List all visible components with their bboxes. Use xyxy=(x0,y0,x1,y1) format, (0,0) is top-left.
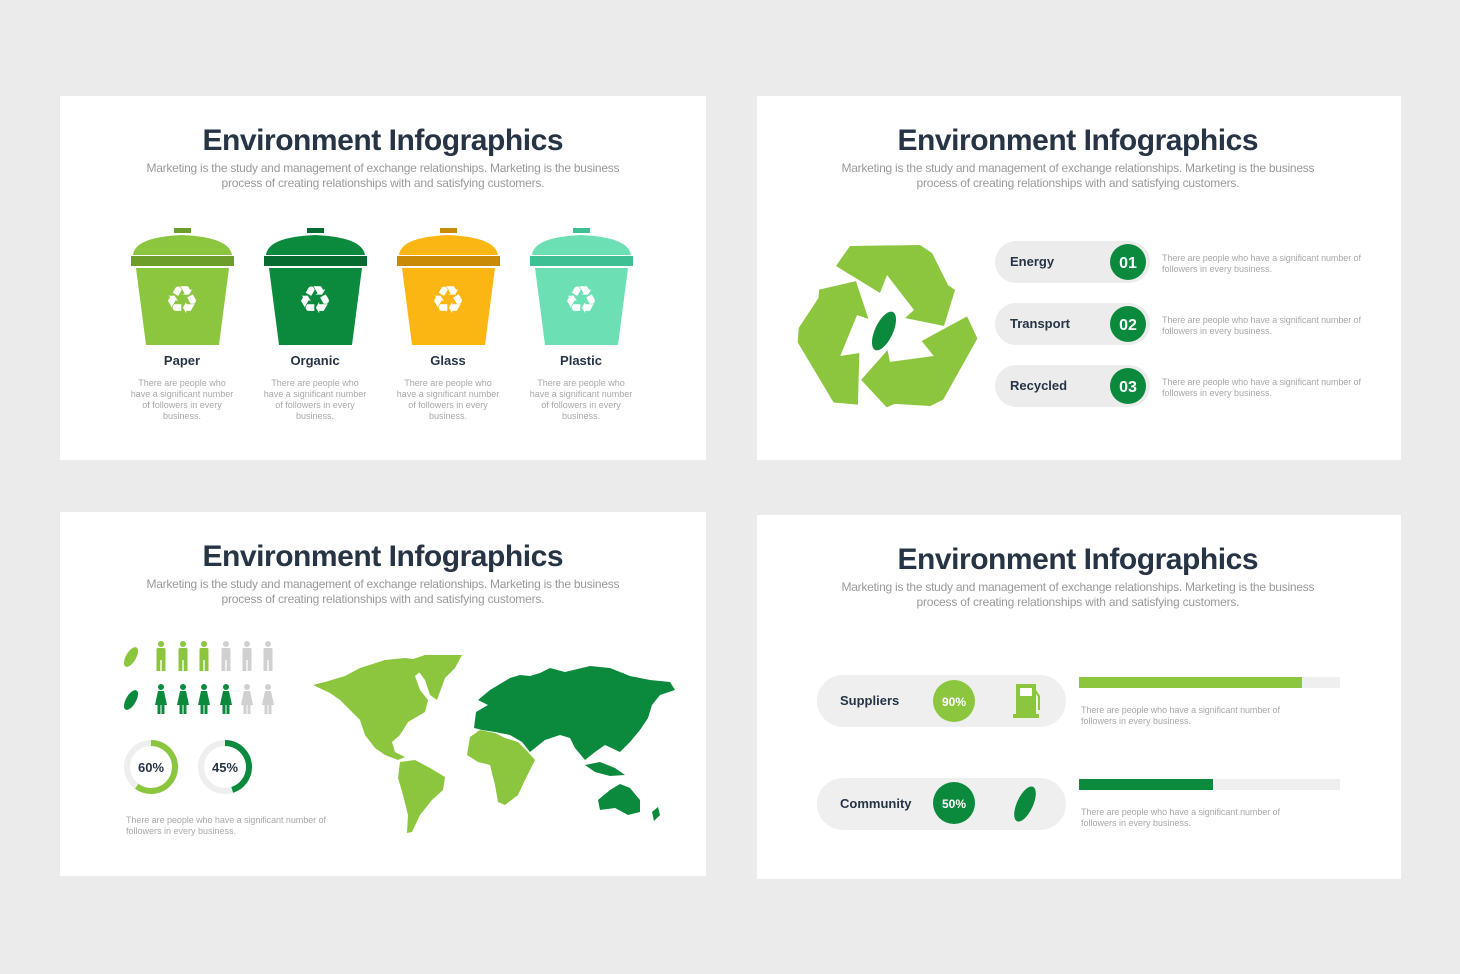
bin: glass: have a significant number xyxy=(397,389,499,399)
bin: organic: have a significant number xyxy=(264,389,366,399)
item: energy: There are people who have a significant number of xyxy=(1162,253,1361,263)
subtitle xyxy=(146,577,620,606)
title: Environment Infographics xyxy=(898,543,1258,576)
world map xyxy=(313,655,675,833)
subtitle: process of creating relationships with and satisfying customers. xyxy=(916,176,1240,190)
bin: glass xyxy=(397,228,500,421)
row: community: followers in every business. xyxy=(1081,818,1191,828)
bin: organic: of followers in every xyxy=(275,400,355,410)
bin: plastic: Plastic xyxy=(560,353,602,368)
item: recycled: followers in every business. xyxy=(1162,388,1272,398)
caption xyxy=(126,815,326,836)
subtitle: Marketing is the study and management of exchange relationships. Marketing is the business xyxy=(842,161,1314,175)
subtitle xyxy=(842,161,1314,190)
bin: paper: ♻ xyxy=(165,280,199,322)
item: recycled: Recycled xyxy=(1010,378,1067,393)
bin: glass: Glass xyxy=(430,353,466,368)
bin: plastic: of followers in every xyxy=(541,400,621,410)
icon row: women xyxy=(121,684,274,714)
subtitle: Marketing is the study and management of exchange relationships. Marketing is the business xyxy=(146,161,620,175)
bin: glass: ♻ xyxy=(431,280,465,322)
subtitle: Marketing is the study and management of exchange relationships. Marketing is the business xyxy=(146,577,620,591)
bin: organic: Organic xyxy=(290,353,340,368)
donut: 45% xyxy=(201,743,249,791)
item: recycled: There are people who have a significant number of xyxy=(1162,377,1361,387)
subtitle: process of creating relationships with and satisfying customers. xyxy=(916,595,1240,609)
bin: organic: There are people who xyxy=(271,378,359,388)
row: suppliers: Suppliers xyxy=(840,693,899,708)
title: Environment Infographics xyxy=(202,124,564,157)
bin: paper: Paper xyxy=(164,353,200,368)
bin: glass: of followers in every xyxy=(408,400,488,410)
caption: There are people who have a significant number of xyxy=(126,815,326,825)
donut: 45%: 45% xyxy=(212,760,238,775)
row: suppliers: 90% xyxy=(942,695,966,709)
bin: plastic: have a significant number xyxy=(530,389,632,399)
bin: organic: business. xyxy=(296,411,334,421)
row: community: There are people who have a significant number of xyxy=(1081,807,1280,817)
item: energy: followers in every business. xyxy=(1162,264,1272,274)
bin: glass: business. xyxy=(429,411,467,421)
bin: paper: have a significant number xyxy=(131,389,233,399)
panel: progress bars xyxy=(757,515,1401,879)
row: suppliers: There are people who have a significant number of xyxy=(1081,705,1280,715)
subtitle: process of creating relationships with and satisfying customers. xyxy=(222,592,544,606)
item: transport xyxy=(995,303,1361,345)
subtitle: process of creating relationships with and satisfying customers. xyxy=(222,176,544,190)
icon: recycle symbol xyxy=(780,245,985,430)
bin: plastic: ♻ xyxy=(564,280,598,322)
bin: paper: of followers in every xyxy=(142,400,222,410)
caption: followers in every business. xyxy=(126,826,236,836)
row: community: 50% xyxy=(942,797,966,811)
item: transport: 02 xyxy=(1119,317,1137,334)
bin: plastic: There are people who xyxy=(537,378,625,388)
bin: plastic: business. xyxy=(562,411,600,421)
donut: 60% xyxy=(127,743,175,791)
subtitle xyxy=(842,580,1314,609)
title: Environment Infographics xyxy=(202,540,564,573)
panel: recycling bins xyxy=(60,96,706,460)
bin: paper: There are people who xyxy=(138,378,226,388)
donut: 60%: 60% xyxy=(138,760,164,775)
row: suppliers: followers in every business. xyxy=(1081,716,1191,726)
bin: organic xyxy=(264,228,367,421)
item: transport: There are people who have a significant number of xyxy=(1162,315,1361,325)
panel: population and map xyxy=(60,512,706,876)
title: Environment Infographics xyxy=(898,124,1258,157)
item: recycled: 03 xyxy=(1119,379,1137,396)
row: community xyxy=(817,778,1340,830)
icon: leaf xyxy=(1010,783,1040,825)
item: energy: Energy xyxy=(1010,254,1055,269)
item: transport: Transport xyxy=(1010,316,1071,331)
bin: paper xyxy=(131,228,234,421)
bin: plastic xyxy=(530,228,633,421)
subtitle: Marketing is the study and management of exchange relationships. Marketing is the business xyxy=(842,580,1314,594)
item: energy: 01 xyxy=(1119,255,1137,272)
item: transport: followers in every business. xyxy=(1162,326,1272,336)
panel: recycle list xyxy=(757,96,1401,460)
item: recycled xyxy=(995,365,1361,407)
row: suppliers xyxy=(817,675,1340,727)
icon: fuel pump xyxy=(1013,684,1040,718)
bin: organic: ♻ xyxy=(298,280,332,322)
row: community: Community xyxy=(840,796,912,811)
item: energy xyxy=(995,241,1361,283)
icon row: men xyxy=(121,641,272,671)
bin: paper: business. xyxy=(163,411,201,421)
bin: glass: There are people who xyxy=(404,378,492,388)
subtitle xyxy=(146,161,620,190)
